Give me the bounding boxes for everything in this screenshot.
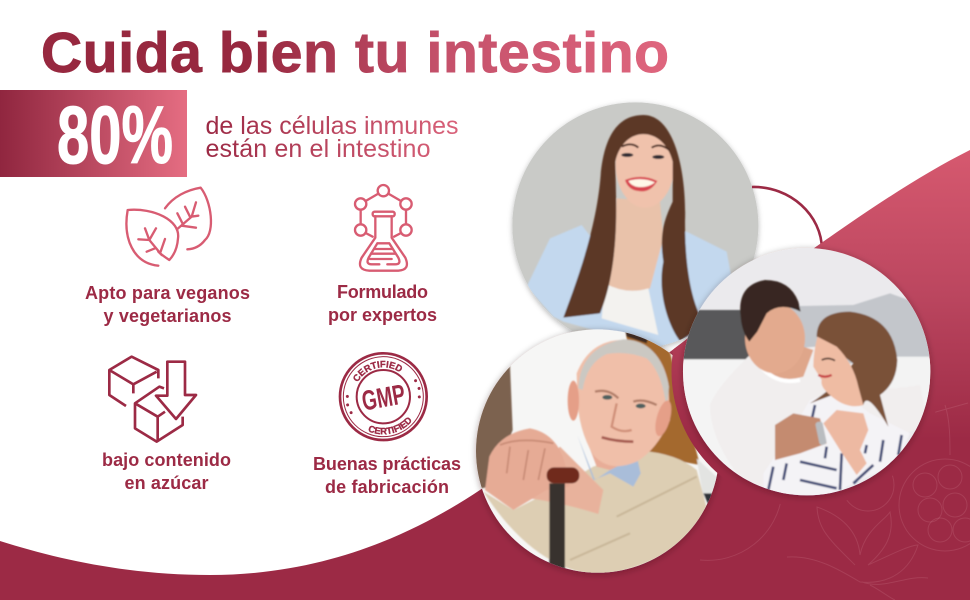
icon: flask and molecule xyxy=(355,185,412,271)
icon: leaves xyxy=(126,188,211,266)
text: immune cells statement xyxy=(206,112,458,163)
label: vegans xyxy=(85,283,250,326)
icon: GMP certified stamp: CERTIFIED xyxy=(368,418,412,434)
label: vegans: y vegetarianos xyxy=(104,306,232,326)
photo: elderly man with cane xyxy=(473,327,723,577)
label: formulated by experts xyxy=(328,282,437,325)
icon: GMP certified stamp xyxy=(338,352,428,442)
label: low sugar xyxy=(102,450,231,493)
icon: GMP certified stamp: CERTIFIED xyxy=(353,360,402,382)
photo: smiling woman xyxy=(510,100,760,350)
decorative arc connector xyxy=(752,187,822,250)
label: vegans: Apto para veganos xyxy=(85,283,250,303)
decoration: faint raspberry and flower xyxy=(700,403,970,600)
banner: 80% xyxy=(0,90,187,181)
photo: embracing couple xyxy=(680,243,937,499)
label: good manufacturing practices xyxy=(313,454,461,497)
text: immune cells statement: están en el intestino xyxy=(206,135,430,163)
label: low sugar: en azúcar xyxy=(124,473,208,493)
label: formulated by experts: Formulado xyxy=(337,282,428,302)
label: low sugar: bajo contenido xyxy=(102,450,231,470)
label: good manufacturing practices: de fabricación xyxy=(325,477,449,497)
maroon ring around couple photo xyxy=(672,236,942,506)
title: Cuida bien tu intestino xyxy=(41,21,669,85)
text: immune cells statement: de las células inmunes xyxy=(206,112,458,140)
icon: sugar cubes with down arrow xyxy=(109,357,196,442)
label: formulated by experts: por expertos xyxy=(328,305,437,325)
banner: 80%: 80% xyxy=(57,90,173,181)
label: good manufacturing practices: Buenas prácticas xyxy=(313,454,461,474)
background wave xyxy=(0,150,970,600)
icon: GMP certified stamp: GMP xyxy=(359,378,408,417)
